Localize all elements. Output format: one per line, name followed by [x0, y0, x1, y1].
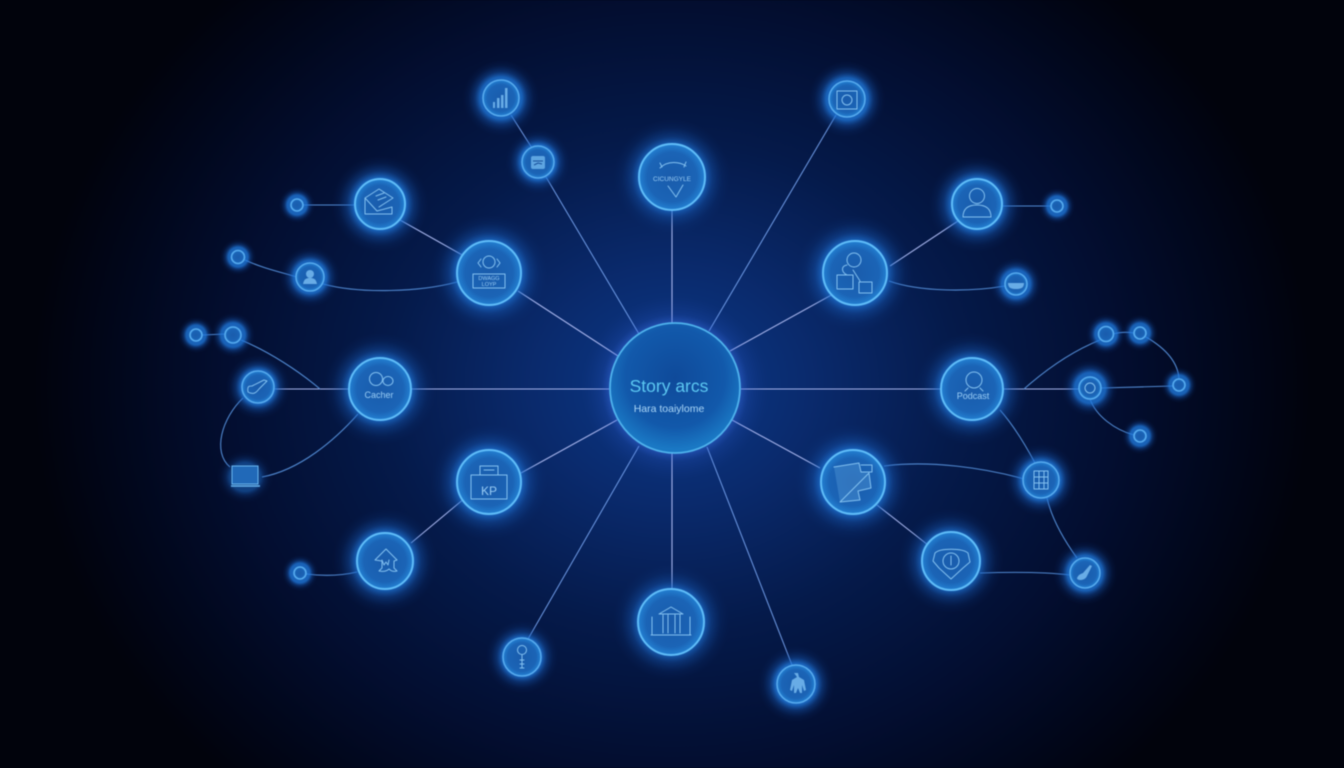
node: cacher: Cacher [364, 390, 394, 400]
node: clock frame [809, 61, 885, 137]
node: figure [758, 646, 834, 722]
node: API briefcase [431, 424, 547, 540]
node: top storyline map [614, 119, 730, 235]
node: user portrait [280, 247, 340, 307]
node: small dot [1039, 188, 1075, 224]
node: search podcast [916, 333, 1028, 445]
node: small tray [990, 258, 1042, 310]
node: small panel [506, 130, 570, 194]
node: search podcast: Podcast [957, 391, 990, 401]
node: small dial [1086, 314, 1126, 354]
node: swirl [1062, 360, 1118, 416]
node: cacher [324, 333, 436, 445]
node: key [1053, 541, 1117, 605]
node: document [795, 424, 911, 540]
node: code keyboard: LOYP [482, 282, 497, 288]
icon: laptop [217, 451, 273, 503]
node: lightbulb [486, 621, 558, 693]
node: people and cup [797, 215, 913, 331]
node: small dot [279, 187, 315, 223]
hub glow [583, 296, 767, 480]
node: top storyline map: CICUNGYLE [653, 176, 692, 183]
node: small dot [1122, 315, 1158, 351]
node: small dot [1161, 367, 1197, 403]
node: small dot [220, 239, 256, 275]
node: code keyboard [431, 215, 547, 331]
node: institution [613, 564, 729, 680]
central hub: Story arcs: Story arcs [630, 376, 709, 396]
node: calculator [1005, 444, 1077, 516]
node: API briefcase: KP [481, 484, 497, 498]
connector lines [202, 115, 1179, 665]
central hub: Story arcs [610, 323, 740, 453]
node: guitar [226, 355, 290, 419]
node: small dot pair [178, 313, 255, 357]
node: envelope [332, 156, 428, 252]
node: code keyboard: DWAGG [478, 276, 500, 282]
node: shield dial [899, 509, 1003, 613]
node: small dot [282, 555, 318, 591]
node: house [333, 509, 437, 613]
node: person [929, 156, 1025, 252]
node: bar chart [463, 60, 539, 136]
node: small dot [1122, 418, 1158, 454]
central hub: Story arcs: Hara toaiylome [634, 403, 704, 415]
